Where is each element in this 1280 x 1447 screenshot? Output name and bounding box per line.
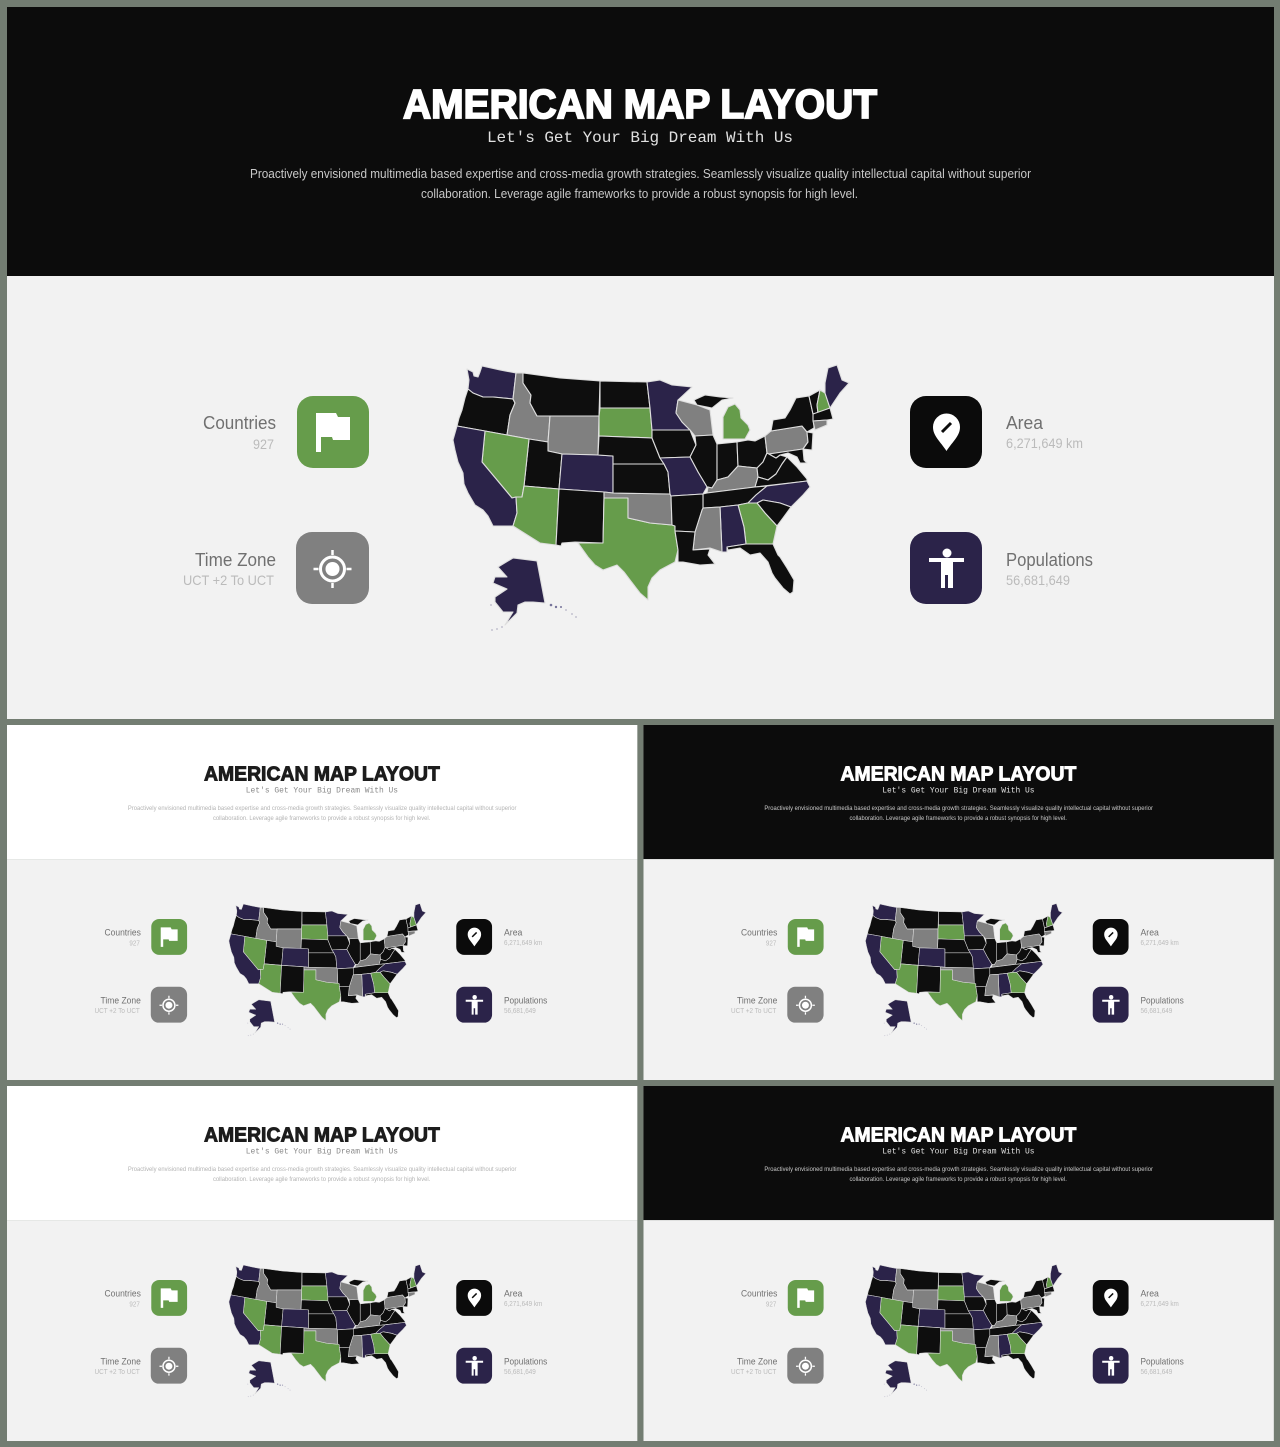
header band [644,1086,1274,1220]
stat: Area: Area [1141,927,1159,937]
stat: Area: 6,271,649 km [1006,435,1083,451]
stat: Time Zone: UCT +2 To UCT [95,1008,141,1015]
description text [128,1166,516,1183]
stat: Area: 6,271,649 km [1141,940,1179,947]
stat: Populations: Populations [504,1357,548,1367]
description text: collaboration. Leverage agile frameworks to provide a robust synopsis for high level. [421,187,858,201]
stat: Countries: Countries [105,1288,141,1298]
subtitle: Let's Get Your Big Dream With Us [246,786,398,795]
stat: Countries [105,1280,187,1316]
stat: Area [456,919,542,955]
stat: Populations: Populations [1141,1357,1184,1367]
body background [644,1220,1274,1441]
description text [128,805,516,822]
stat: Populations [1093,987,1184,1023]
stat: Area [456,1280,542,1316]
stat: Populations: 56,681,649 [1006,572,1070,588]
description text: Proactively envisioned multimedia based expertise and cross-media growth strategies. Seamlessly visualize quality intellectual capital without superior [128,1166,516,1173]
description text [764,805,1153,822]
description text: Proactively envisioned multimedia based expertise and cross-media growth strategies. Seamlessly visualize quality intellectual capital without superior [250,167,1031,181]
map: United States [865,903,1062,1036]
stat: Time Zone: Time Zone [737,1357,777,1367]
description text: collaboration. Leverage agile frameworks to provide a robust synopsis for high level. [849,1176,1067,1183]
stat: Time Zone: UCT +2 To UCT [731,1008,777,1015]
stat: Populations [456,987,548,1023]
subtitle: Let's Get Your Big Dream With Us [882,1147,1035,1156]
panel: light slide, bottom left [7,1086,637,1441]
header band [7,7,1274,276]
title: AMERICAN MAP LAYOUT [841,1124,1077,1146]
map: United States [229,1264,426,1397]
stat: Populations: Populations [504,996,548,1006]
title: AMERICAN MAP LAYOUT [204,763,440,785]
stat: Time Zone [95,1348,187,1384]
subtitle: Let's Get Your Big Dream With Us [882,786,1035,795]
stat: Time Zone [731,1348,824,1384]
title: AMERICAN MAP LAYOUT [841,763,1077,785]
stat: Countries: 927 [766,940,776,947]
stat: Area: 6,271,649 km [504,1301,542,1308]
header band [7,725,637,859]
body background [7,276,1274,719]
stat: Time Zone: UCT +2 To UCT [95,1369,141,1376]
description text: Proactively envisioned multimedia based expertise and cross-media growth strategies. Seamlessly visualize quality intellectual capital without superior [128,805,516,812]
stat: Time Zone [95,987,187,1023]
stat: Countries: 927 [253,436,274,452]
description text: collaboration. Leverage agile frameworks to provide a robust synopsis for high level. [213,1176,431,1183]
body background [644,859,1274,1080]
stat: Countries: Countries [105,927,141,937]
panel: main slide [7,7,1274,719]
stat: Countries: Countries [741,1288,778,1298]
description text: Proactively envisioned multimedia based expertise and cross-media growth strategies. Seamlessly visualize quality intellectual capital without superior [764,1166,1153,1173]
panel: dark slide, top right [644,725,1274,1080]
stat: Populations: Populations [1141,996,1184,1006]
stat: Area: Area [1006,413,1044,433]
map: United States [865,1264,1062,1397]
stat: Time Zone: Time Zone [195,550,276,570]
stat: Countries: Countries [203,413,276,433]
header band [644,725,1274,859]
stat: Populations: 56,681,649 [504,1369,536,1376]
stat: Area: 6,271,649 km [504,940,542,947]
title: AMERICAN MAP LAYOUT [403,81,877,127]
stat: Time Zone [183,532,369,604]
stat: Populations: 56,681,649 [1141,1008,1172,1015]
stat: Time Zone: Time Zone [101,996,141,1006]
stat: Countries [741,919,824,955]
stat: Area [910,396,1083,468]
stat: Area: 6,271,649 km [1141,1301,1179,1308]
stat: Countries [203,396,369,468]
map: United States [453,365,849,631]
stat: Time Zone: UCT +2 To UCT [731,1369,777,1376]
stat: Area [1093,919,1179,955]
stat: Time Zone: Time Zone [101,1357,141,1367]
body background [7,1220,637,1441]
subtitle: Let's Get Your Big Dream With Us [487,129,793,147]
panel: light slide, top left [7,725,637,1080]
panel: dark slide, bottom right [644,1086,1274,1441]
stat: Populations [456,1348,548,1384]
stat: Countries: 927 [766,1301,776,1308]
description text [764,1166,1153,1183]
stat: Area: Area [504,1288,522,1298]
stat: Time Zone: UCT +2 To UCT [183,572,274,588]
description text: collaboration. Leverage agile frameworks to provide a robust synopsis for high level. [849,815,1067,822]
stat: Countries: 927 [129,1301,140,1308]
stat: Area [1093,1280,1179,1316]
stat: Area: Area [1141,1288,1159,1298]
stat: Time Zone [731,987,824,1023]
description text: Proactively envisioned multimedia based expertise and cross-media growth strategies. Seamlessly visualize quality intellectual capital without superior [764,805,1153,812]
stat: Countries [105,919,187,955]
stat: Time Zone: Time Zone [737,996,777,1006]
description text [250,167,1031,201]
stat: Countries: 927 [129,940,140,947]
stat: Countries: Countries [741,927,778,937]
stat: Area: Area [504,927,522,937]
header band [7,1086,637,1220]
stat: Populations [1093,1348,1184,1384]
stat: Populations [910,532,1093,604]
stat: Populations: Populations [1006,550,1093,570]
title: AMERICAN MAP LAYOUT [204,1124,440,1146]
stat: Populations: 56,681,649 [504,1008,536,1015]
map: United States [229,903,426,1036]
stat: Populations: 56,681,649 [1141,1369,1172,1376]
body background [7,859,637,1080]
description text: collaboration. Leverage agile frameworks to provide a robust synopsis for high level. [213,815,431,822]
stat: Countries [741,1280,824,1316]
subtitle: Let's Get Your Big Dream With Us [246,1147,398,1156]
